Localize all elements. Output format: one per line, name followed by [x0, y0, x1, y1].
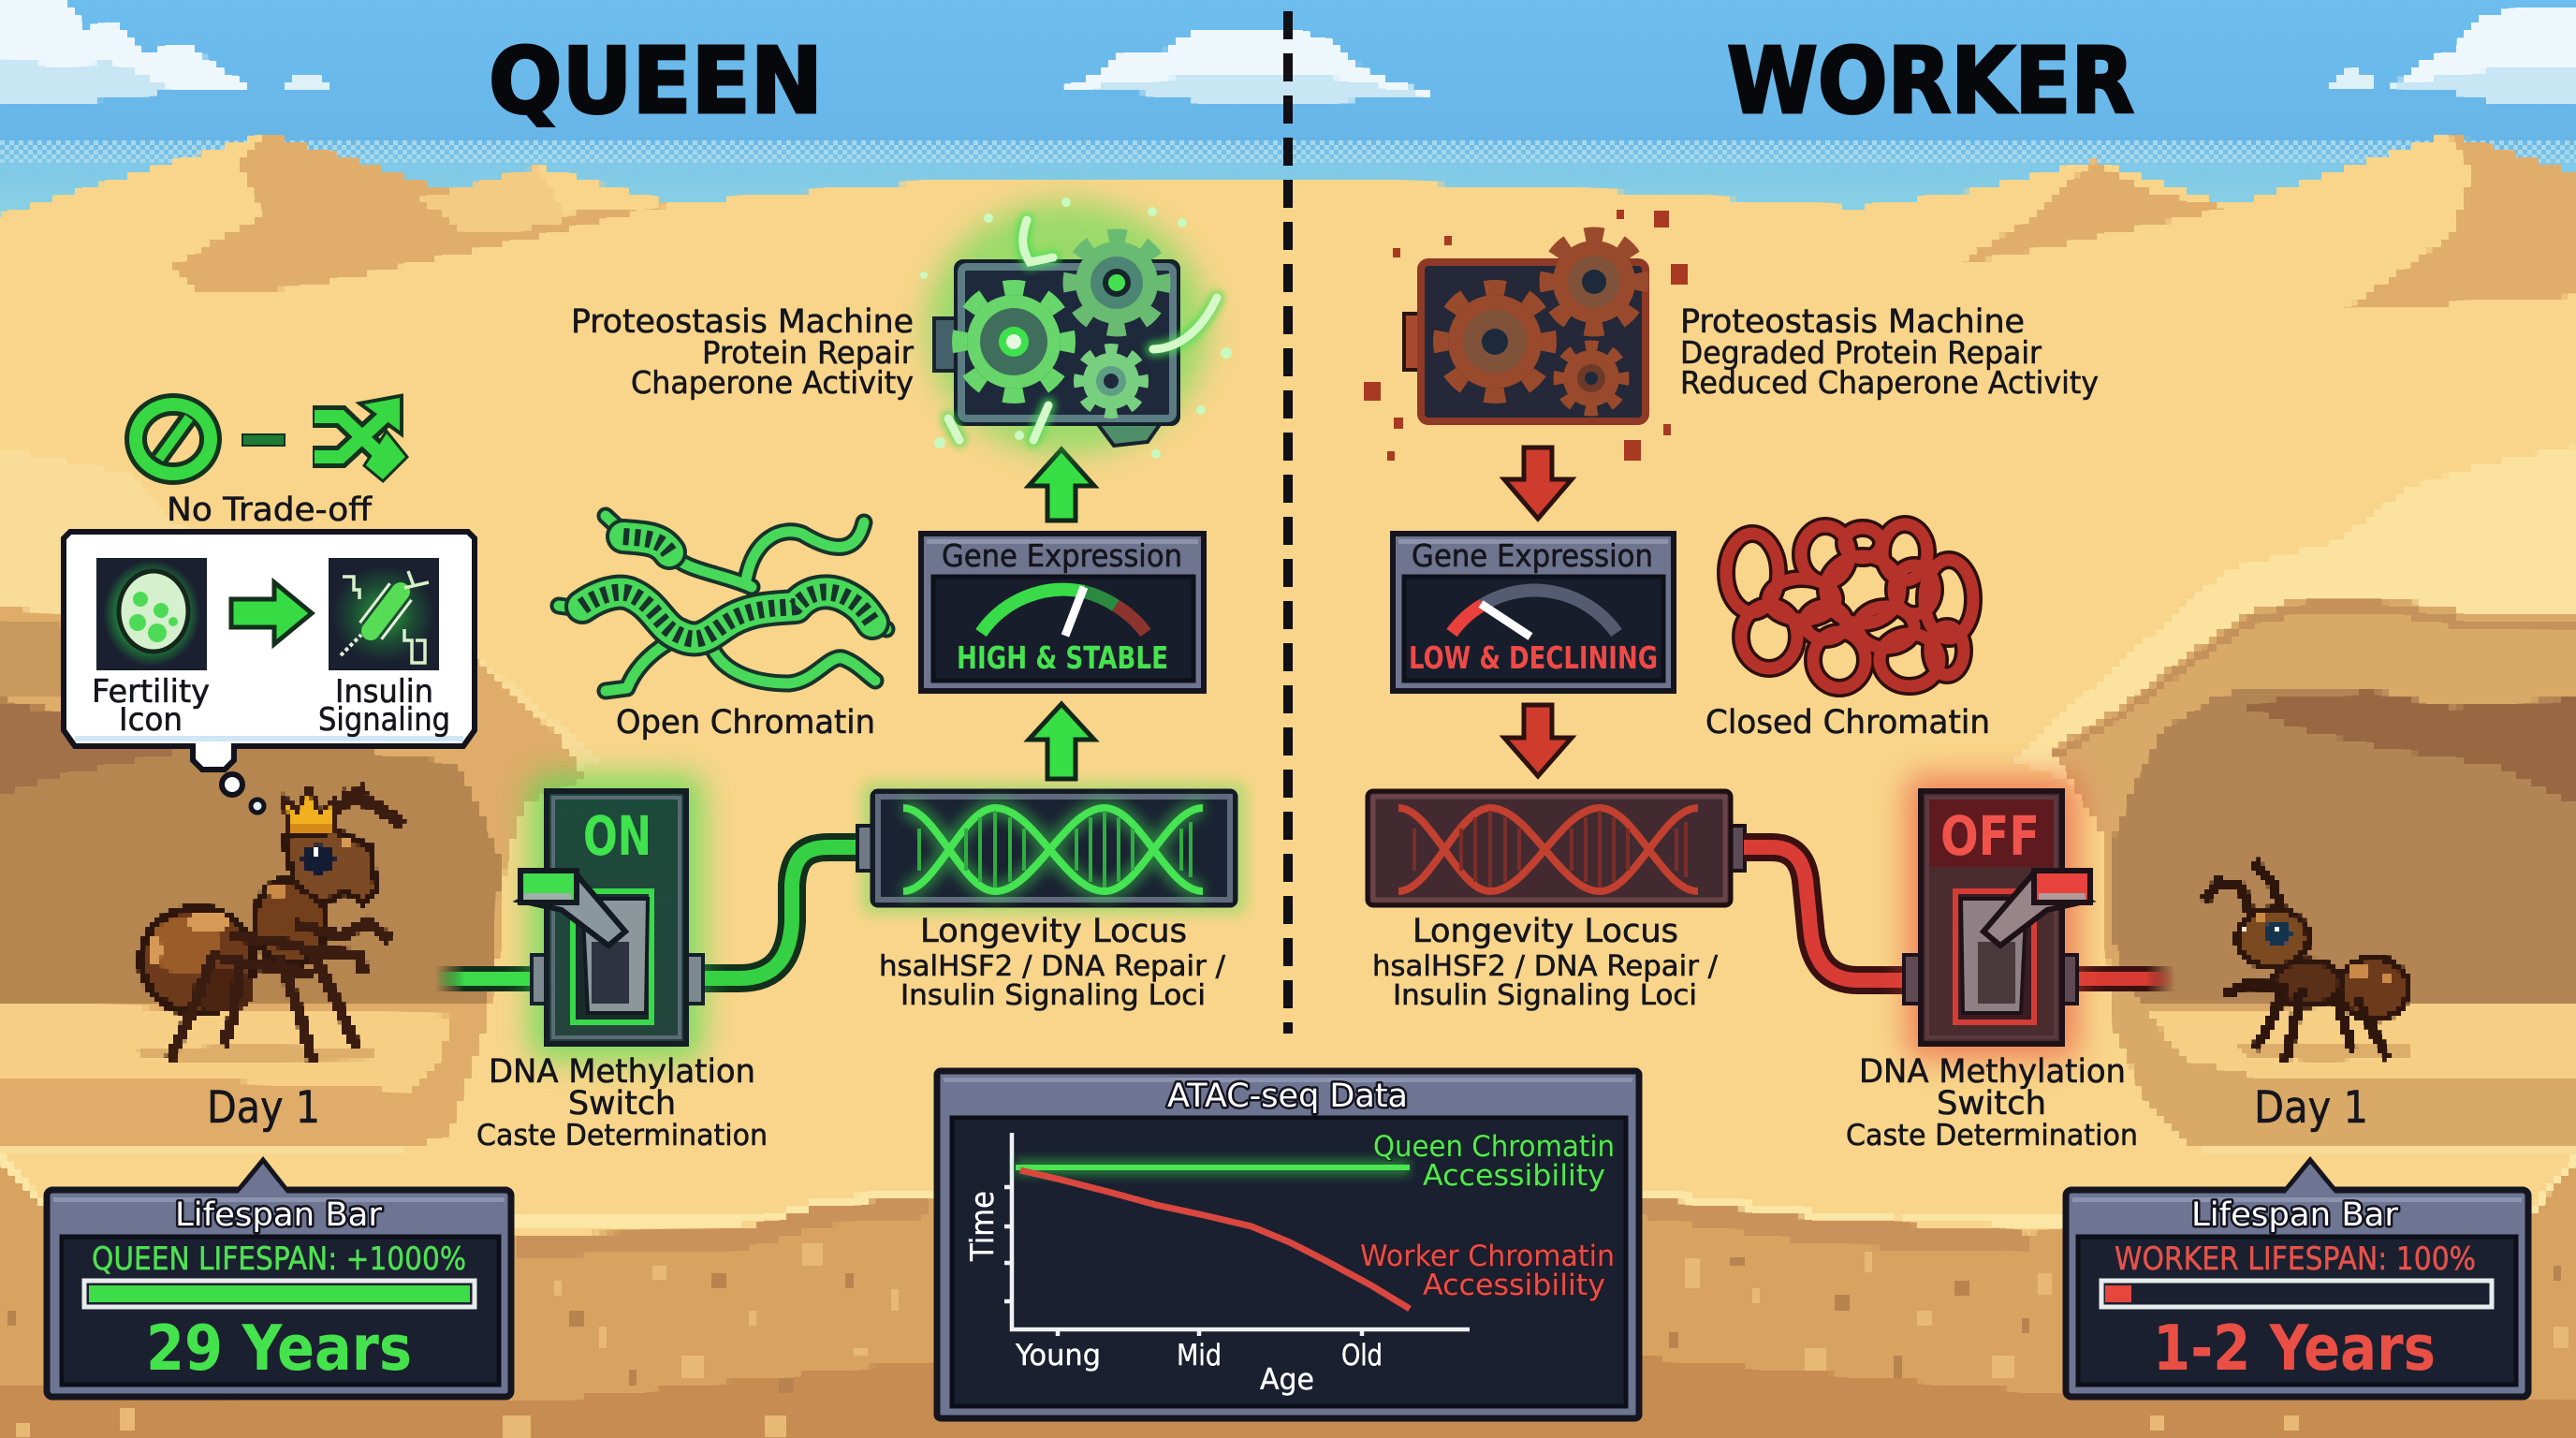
label: worker methylation switch: Switch [1937, 1085, 2046, 1123]
panel: ATAC-seq data [937, 1071, 1639, 1418]
label: queen day 1: Day 1 [207, 1082, 320, 1134]
background: foreground ground [0, 1153, 2576, 1438]
panel: worker longevity locus [1368, 791, 1745, 905]
gear: large [959, 287, 1068, 396]
label: worker proteostasis: Proteostasis Machine [1680, 303, 2025, 341]
label: queen proteostasis: Chaperone Activity [631, 364, 914, 401]
icon: fertility egg [96, 558, 207, 670]
background: worker burrow [2012, 446, 2576, 1153]
panel: worker lifespan bar: WORKER LIFESPAN: 100% [2115, 1240, 2476, 1278]
label: fertility icon: Icon [119, 701, 183, 739]
panel: worker methylation switch [1904, 775, 2090, 1060]
panel: queen gene expression [921, 534, 1204, 691]
queen wiring [435, 847, 859, 991]
gauge [981, 587, 1146, 636]
ribbons: double helix sections [582, 536, 872, 639]
panel: worker lifespan bar: 1-2 Years [2153, 1312, 2436, 1385]
panel: queen lifespan bar: 29 Years [146, 1312, 412, 1385]
label: queen proteostasis: Protein Repair [702, 334, 914, 371]
label: open chromatin: Open Chromatin [616, 704, 875, 741]
icon: closed chromatin [1726, 524, 1973, 688]
panel: queen lifespan bar: QUEEN LIFESPAN: +1000% [92, 1240, 466, 1278]
label: worker proteostasis [1680, 303, 2099, 401]
panel: queen gene expression: HIGH & STABLE [957, 639, 1168, 676]
panel: ATAC-seq data: ATAC-seq Data [1167, 1078, 1408, 1115]
chart: accessibility over age [964, 1130, 1615, 1397]
label: queen longevity locus: Longevity Locus [920, 913, 1187, 950]
label: worker longevity locus: hsalHSF2 / DNA Repair / [1372, 950, 1719, 983]
arrow: queen locus to gene expression [1029, 704, 1094, 779]
gear: top rust [1546, 234, 1642, 330]
background: sky [0, 0, 2576, 225]
label: no trade-off: No Trade-off [167, 492, 373, 529]
chart: accessibility over age: Old [1341, 1339, 1383, 1372]
chart: accessibility over age: Worker Chromatin [1360, 1240, 1615, 1273]
gear: small rust [1559, 345, 1624, 411]
worker wiring [1744, 847, 2175, 991]
panel: queen gene expression: Gene Expression [942, 537, 1182, 574]
sparks [948, 220, 1217, 440]
label: fertility icon: Fertility [92, 673, 210, 711]
icon: worker dna helix [1398, 808, 1698, 891]
gauge [1452, 591, 1617, 637]
arrow: worker gene expression to locus [1504, 705, 1572, 776]
chart: accessibility over age: Age [1260, 1363, 1314, 1397]
title: WORKER: WORKER [1727, 28, 2134, 134]
divider: dashed center line [1283, 11, 1293, 1034]
label: OFF: OFF [1940, 804, 2040, 868]
icon: queen proteostasis machine [920, 198, 1232, 459]
gear: top [1070, 236, 1164, 330]
arrow: worker proteostasis to gene expression [1504, 448, 1572, 519]
label: insulin signaling: Signaling [318, 701, 450, 739]
label: worker proteostasis: Reduced Chaperone Activity [1680, 364, 2099, 401]
label: queen methylation switch: Switch [568, 1085, 676, 1123]
rust flakes [1364, 210, 1688, 461]
label: worker proteostasis: Degraded Protein Repair [1680, 334, 2042, 371]
chart: accessibility over age: Young [1015, 1339, 1101, 1372]
label: queen proteostasis: Proteostasis Machine [571, 303, 914, 341]
chart: accessibility over age: Accessibility [1423, 1159, 1605, 1193]
panel: queen methylation switch [520, 775, 703, 1060]
label: queen proteostasis [571, 303, 914, 401]
label: queen methylation switch: Caste Determination [476, 1119, 768, 1152]
label: worker methylation switch: Caste Determination [1846, 1119, 2138, 1152]
label: insulin signaling: Insulin [335, 673, 433, 711]
chart: accessibility over age: Accessibility [1423, 1269, 1605, 1302]
arrow: queen gene expression to proteostasis [1029, 449, 1094, 521]
gear: large rust [1441, 287, 1549, 396]
chart: accessibility over age: Time [964, 1191, 1002, 1262]
label: insulin signaling [318, 673, 450, 739]
label: worker day 1: Day 1 [2254, 1082, 2368, 1134]
label: worker methylation switch: DNA Methylation [1859, 1053, 2126, 1091]
icon: open chromatin [559, 516, 886, 691]
title: QUEEN: QUEEN [489, 28, 823, 134]
label: queen longevity locus [879, 913, 1226, 1012]
queen ant [131, 788, 398, 1062]
panel: queen longevity locus [857, 782, 1247, 915]
label: queen methylation switch [476, 1053, 768, 1152]
panel: queen lifespan bar [47, 1160, 511, 1397]
label: closed chromatin: Closed Chromatin [1705, 704, 1990, 741]
panel: worker gene expression: LOW & DECLINING [1409, 639, 1658, 676]
label: queen methylation switch: DNA Methylation [489, 1053, 755, 1091]
label: worker longevity locus: Longevity Locus [1412, 913, 1678, 950]
label: worker methylation switch [1846, 1053, 2138, 1152]
background: clouds [0, 0, 2576, 101]
panel: worker gene expression [1393, 534, 1674, 691]
chart: accessibility over age: Queen Chromatin [1373, 1130, 1615, 1164]
arrow: fertility to insulin [231, 582, 312, 644]
label: queen longevity locus: Insulin Signaling Loci [900, 979, 1206, 1012]
panel: worker gene expression: Gene Expression [1412, 537, 1653, 574]
icon: thought dots [222, 774, 264, 813]
panel: worker lifespan bar [2066, 1160, 2528, 1397]
background: queen burrow [0, 448, 599, 1153]
icon: insulin syringe [329, 558, 439, 670]
label: ON: ON [583, 804, 651, 868]
label: queen longevity locus: hsalHSF2 / DNA Repair / [879, 950, 1226, 983]
label: worker longevity locus: Insulin Signaling Loci [1393, 979, 1697, 1012]
label: fertility icon [92, 673, 210, 739]
icon: worker proteostasis machine [1364, 210, 1688, 461]
panel: thought bubble [64, 532, 475, 813]
icon: no trade-off symbols [136, 398, 405, 479]
label: worker longevity locus [1372, 913, 1719, 1012]
tails: thin strands [559, 516, 886, 691]
chart: accessibility over age: Mid [1177, 1339, 1222, 1372]
icon: queen dna helix [903, 808, 1203, 891]
worker ant [2207, 866, 2408, 1062]
panel: queen lifespan bar: Lifespan Bar [175, 1196, 383, 1234]
panel: worker lifespan bar: Lifespan Bar [2191, 1196, 2399, 1234]
gear: small [1079, 349, 1143, 413]
